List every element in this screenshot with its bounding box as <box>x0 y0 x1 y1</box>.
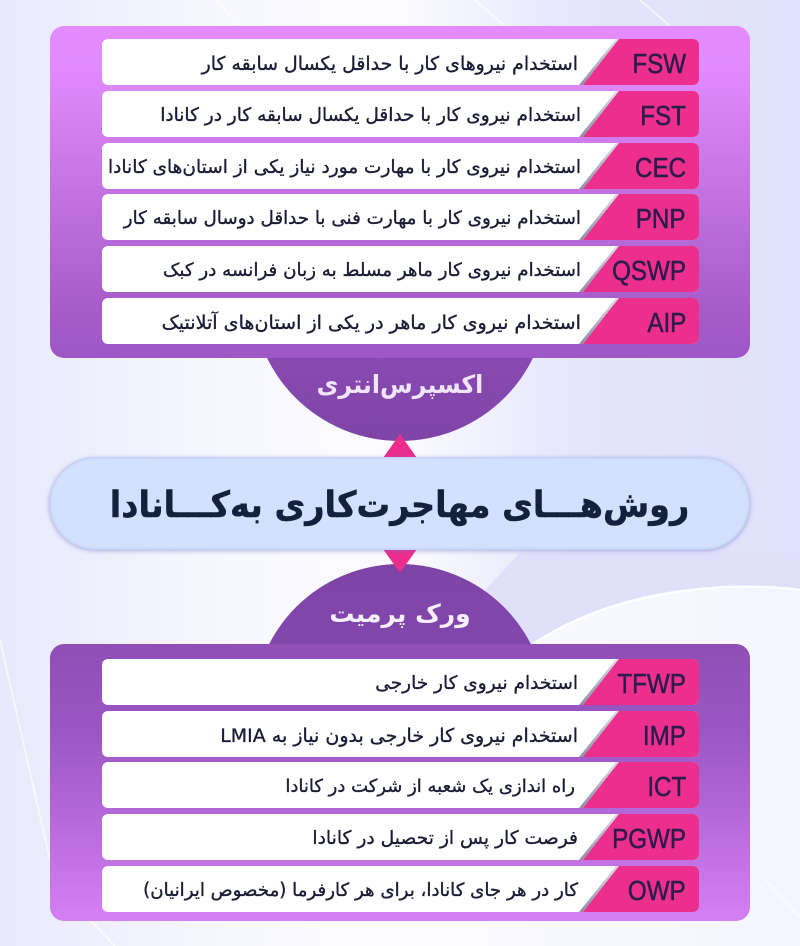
row: FST: استخدام نیروی کار با حداقل یکسال سابقه کار در کانادا <box>160 105 581 126</box>
row: FST: FST <box>640 100 686 131</box>
row: QSWP: استخدام نیروی کار ماهر مسلط به زبان فرانسه در کبک <box>163 260 581 281</box>
row: IMP: IMP <box>643 720 686 751</box>
arc: work permit <box>269 564 531 644</box>
row: PNP: PNP <box>636 203 686 234</box>
arrow: up triangle <box>384 434 416 457</box>
row: FST <box>102 91 699 137</box>
row: CEC <box>102 143 699 189</box>
row: IMP: استخدام نیروی کار خارجی بدون نیاز به LMIA <box>220 725 578 747</box>
title: روش‌هـــای مهاجرت‌کاری به‌کـــانادا <box>110 485 689 526</box>
row: FSW: FSW <box>632 48 686 79</box>
title <box>49 457 750 550</box>
label: work permit: ورک پرمیت <box>329 599 471 628</box>
arrow: down triangle <box>384 550 416 573</box>
row: PGWP <box>102 814 699 860</box>
row: AIP: AIP <box>647 307 686 338</box>
row: PNP <box>102 194 699 240</box>
row: QSWP <box>102 246 699 292</box>
row: IMP <box>102 711 699 757</box>
row: PNP: استخدام نیروی کار با مهارت فنی با حداقل دوسال سابقه کار <box>124 208 581 229</box>
row: PGWP: PGWP <box>612 823 686 854</box>
row: ICT: راه اندازی یک شعبه از شرکت در کانادا <box>285 776 575 797</box>
row: ICT <box>102 762 699 808</box>
row: TFWP: استخدام نیروی کار خارجی <box>375 673 578 694</box>
row: FSW <box>102 39 699 85</box>
row: CEC: CEC <box>635 152 686 183</box>
row: CEC: استخدام نیروی کار با مهارت مورد نیاز یکی از استان‌های کانادا <box>108 157 581 178</box>
row: QSWP: QSWP <box>612 255 686 286</box>
row: ICT: ICT <box>647 771 686 802</box>
arc: express entry <box>267 358 533 441</box>
row: OWP: کار در هر جای کانادا، برای هر کارفرما (مخصوص ایرانیان) <box>143 880 578 901</box>
label: express entry: اکسپرس‌انتری <box>317 370 483 399</box>
row: TFWP <box>102 659 699 705</box>
row: PGWP: فرصت کار پس از تحصیل در کانادا <box>312 828 578 849</box>
row: OWP: OWP <box>628 875 686 906</box>
row: TFWP: TFWP <box>617 668 686 699</box>
row: OWP <box>102 866 699 912</box>
row: FSW: استخدام نیروهای کار با حداقل یکسال سابقه کار <box>202 53 578 75</box>
row: AIP <box>102 298 699 344</box>
panel: work permit <box>50 644 750 921</box>
panel: express entry <box>50 26 750 358</box>
row: AIP: استخدام نیروی کار ماهر در یکی از استان‌های آتلانتیک <box>162 311 581 334</box>
